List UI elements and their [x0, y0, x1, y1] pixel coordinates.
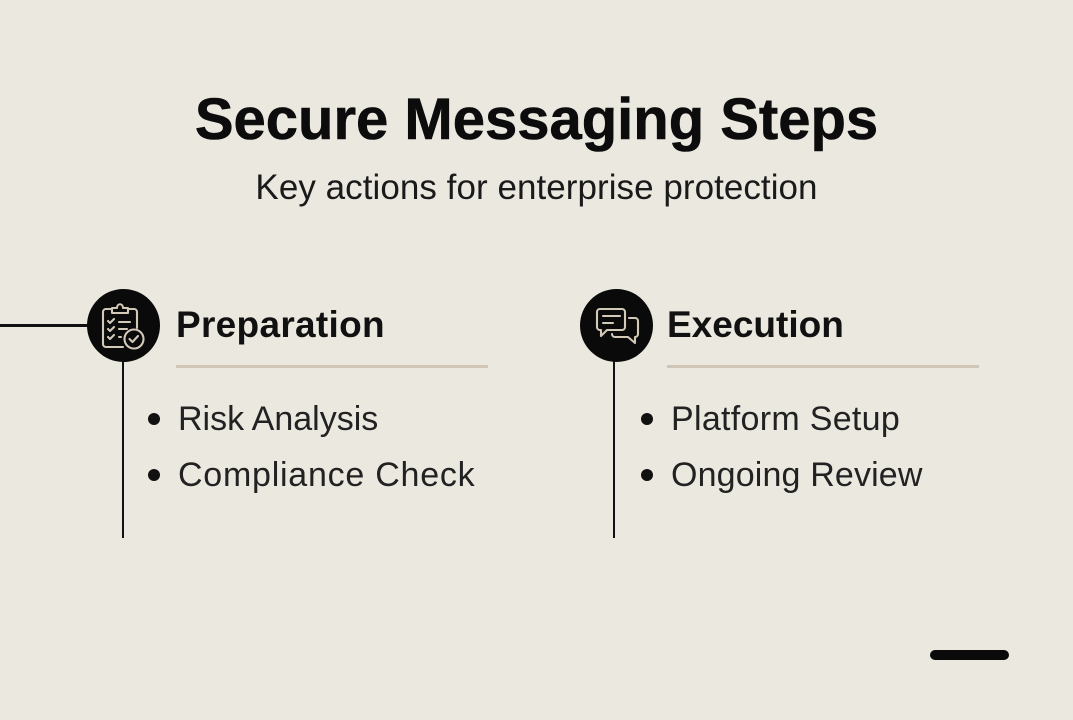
label: Platform Setup — [671, 400, 900, 438]
heading: Execution: Execution — [667, 304, 844, 345]
icon: clipboard checklist — [87, 289, 160, 362]
label: Ongoing Review — [671, 456, 923, 494]
footer accent bar — [930, 650, 1009, 660]
subtitle: Key actions for enterprise protection — [255, 168, 818, 207]
title: Secure Messaging Steps — [195, 87, 878, 152]
label: Compliance Check — [178, 456, 475, 494]
bullet — [641, 469, 653, 481]
list item: Risk Analysis — [148, 400, 378, 438]
connector line from left — [0, 324, 90, 326]
vertical timeline line — [612, 359, 615, 538]
list item: Platform Setup — [641, 400, 900, 438]
bullet — [148, 469, 160, 481]
bullet — [641, 413, 653, 425]
vertical timeline line — [122, 359, 124, 538]
heading: Preparation: Preparation — [176, 304, 385, 345]
panel: preparation — [0, 289, 488, 538]
label: Risk Analysis — [178, 400, 378, 438]
divider — [667, 365, 979, 368]
panel: execution — [580, 289, 979, 538]
divider — [176, 365, 488, 368]
bullet — [148, 413, 160, 425]
icon: chat bubbles — [580, 289, 653, 362]
list item: Compliance Check — [148, 456, 475, 494]
list item: Ongoing Review — [641, 456, 923, 494]
